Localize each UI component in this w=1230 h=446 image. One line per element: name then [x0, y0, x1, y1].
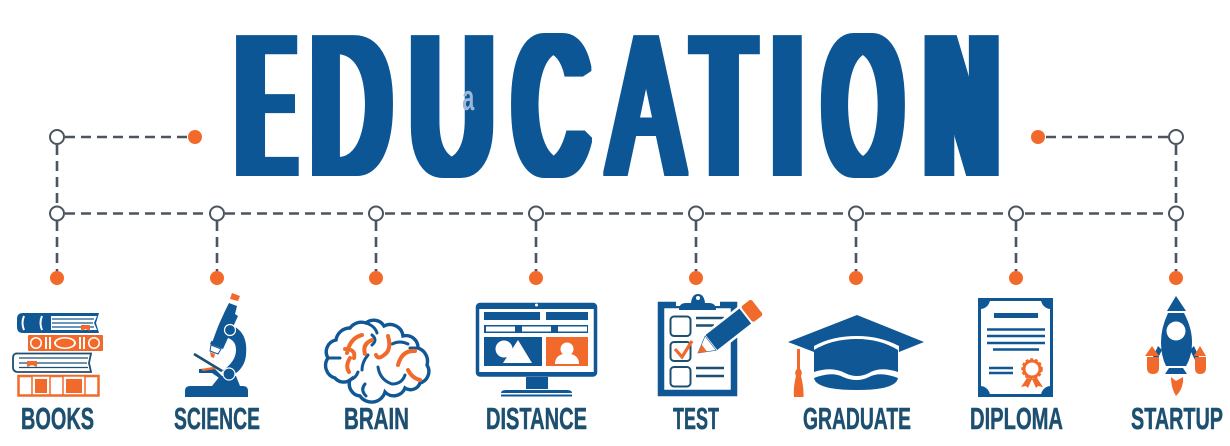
title: E: [241, 0, 291, 216]
title: C: [515, 0, 587, 217]
title: I: [777, 0, 798, 216]
icon: microscope: [185, 293, 248, 397]
icon: graduation cap: [788, 315, 924, 397]
label: graduate: GRADUATE: [803, 402, 911, 436]
icon: books: [13, 313, 103, 396]
title: D: [312, 0, 389, 216]
title: A: [610, 0, 682, 216]
icon: distance learning monitor: [478, 304, 596, 396]
connector network: [50, 130, 1183, 285]
label: test: TEST: [673, 402, 719, 436]
title: N: [928, 0, 995, 216]
label: science: SCIENCE: [174, 402, 260, 436]
watermark letter: a: [462, 78, 475, 118]
title: T: [697, 0, 751, 217]
icon: rocket: [1145, 296, 1206, 396]
label: books: BOOKS: [21, 402, 94, 436]
icon: brain: [326, 320, 429, 402]
title: U: [411, 0, 493, 217]
icon: diploma: [979, 298, 1052, 397]
title: [241, 0, 995, 217]
label: distance: DISTANCE: [486, 402, 587, 436]
title: O: [825, 0, 901, 217]
label: diploma: DIPLOMA: [970, 402, 1063, 436]
label: brain: BRAIN: [344, 402, 409, 436]
icon: test clipboard: [661, 294, 763, 393]
